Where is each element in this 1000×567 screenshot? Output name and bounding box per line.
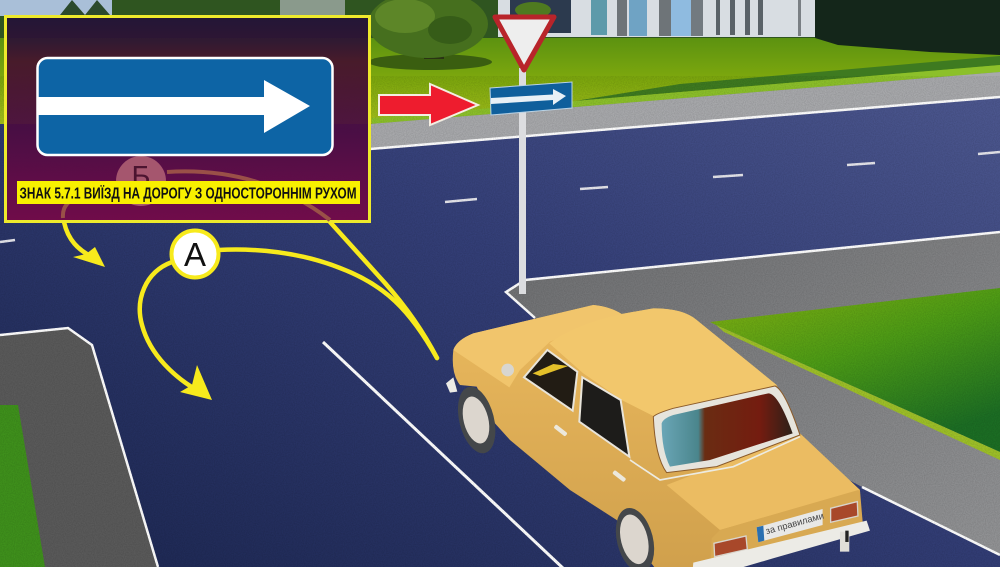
- house: [498, 0, 815, 37]
- top sidewalk: [370, 72, 1000, 149]
- right corner sidewalk: [506, 232, 1000, 555]
- red pointer arrow: [379, 84, 478, 125]
- licence plate: [757, 509, 825, 542]
- faded label circle B: [116, 156, 166, 206]
- yellow route arrow A: [140, 250, 437, 400]
- door handles: [553, 424, 626, 482]
- lawn tree: [368, 0, 492, 70]
- yellow route arrow B: [64, 222, 437, 358]
- faded label circle B: Б: [131, 161, 151, 193]
- right grass field: [710, 288, 1000, 460]
- mirror: [501, 364, 514, 376]
- rear window: [653, 386, 800, 473]
- centre line: [323, 342, 565, 567]
- rear panel: [711, 490, 863, 567]
- front bumper: [446, 377, 457, 393]
- rear wheel: [610, 504, 660, 567]
- yellow car: [446, 305, 870, 567]
- road edge line: [370, 97, 1000, 149]
- rear bumper: [693, 521, 870, 567]
- side windows: [524, 350, 577, 411]
- trim line: [630, 437, 800, 480]
- info panel: [6, 16, 370, 222]
- licence plate: за правилами: [764, 511, 825, 536]
- faded route arrow: [63, 171, 330, 220]
- lane dashes: [0, 152, 1000, 242]
- car silhouette and side: [453, 305, 863, 567]
- yield sign with post: [495, 17, 554, 294]
- front wheel: [452, 383, 502, 457]
- left corner sidewalk: [0, 328, 158, 567]
- label circle A: А: [184, 236, 206, 273]
- hood: [453, 305, 622, 387]
- caption: ЗНАК 5.7.1 ВИЇЗД НА ДОРОГУ З ОДНОСТОРОННІМ РУХОМ: [20, 184, 356, 202]
- background landscape: [0, 0, 1000, 124]
- label circle A: [172, 230, 218, 278]
- caption: [17, 181, 360, 204]
- small one-way sign: [490, 82, 572, 115]
- trunk lid: [667, 433, 860, 530]
- large one-way sign: [38, 58, 332, 155]
- tail lights: [714, 502, 858, 557]
- roof: [549, 308, 777, 416]
